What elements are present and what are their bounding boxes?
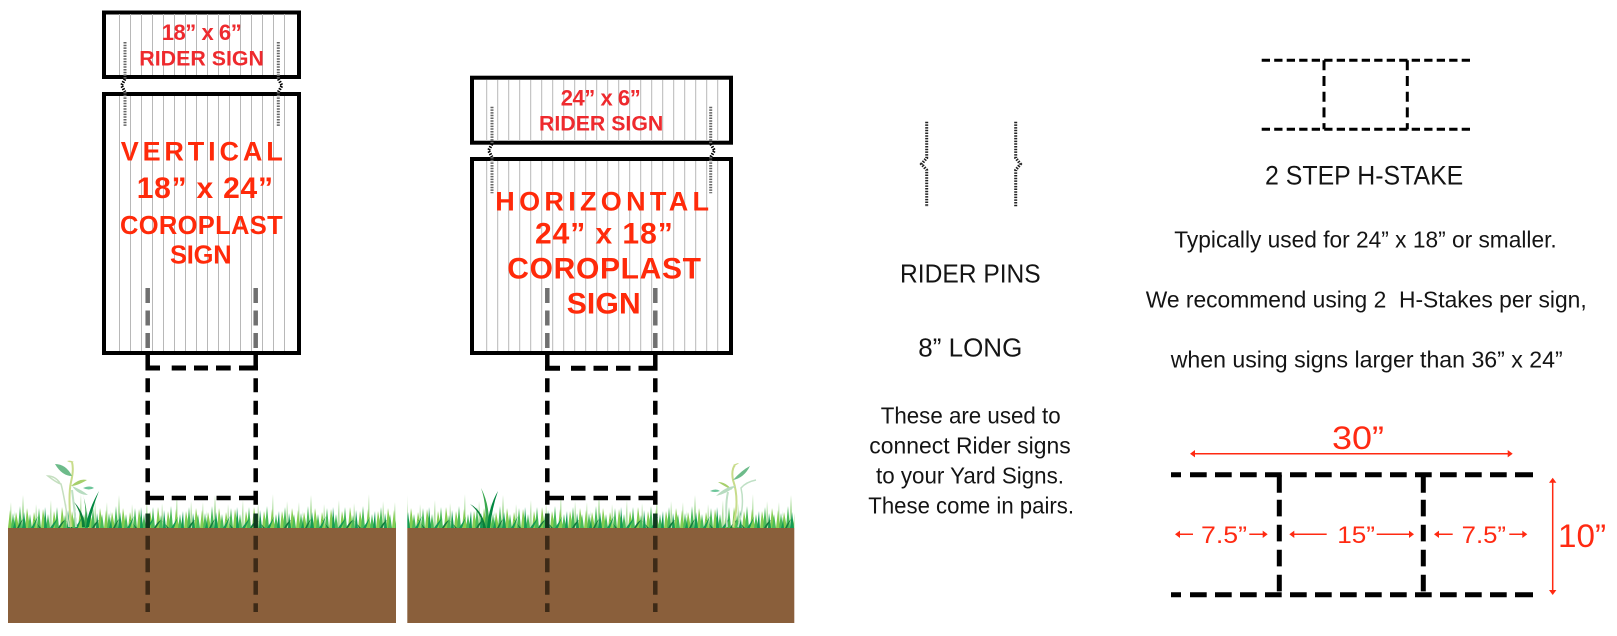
- text block: rider pin description: to your Yard Signs.: [876, 462, 1064, 488]
- icon: H-stake small: [1262, 60, 1471, 129]
- dimension: 30 inch width: 30”: [1332, 420, 1384, 456]
- heading: rider pins: RIDER PINS: [900, 258, 1041, 288]
- panel: horizontal sign assembly: [407, 78, 794, 623]
- icon: rider pin pair: [922, 122, 1020, 207]
- rider sign label: 18” x 6”: [162, 20, 242, 45]
- icon: young plant: [710, 463, 756, 527]
- rider sign label: RIDER SIGN: [539, 113, 663, 136]
- dimension: 30 inch width: [1190, 420, 1513, 457]
- main sign label: SIGN: [567, 287, 641, 320]
- H-stake outline: [1171, 475, 1533, 595]
- main sign label: VERTICAL: [121, 136, 283, 166]
- dimension: center 15 inch: [1289, 522, 1414, 549]
- main sign label: 18” x 24”: [137, 172, 273, 205]
- main sign label: HORIZONTAL: [495, 187, 709, 217]
- rider pins connecting signs: [122, 42, 282, 127]
- main sign label: SIGN: [170, 241, 232, 269]
- main sign label: COROPLAST: [507, 252, 701, 285]
- icon: grass tuft: [470, 488, 498, 528]
- text block: usage: Typically used for 24” x 18” or smaller.: [1174, 226, 1557, 252]
- rider sign label: RIDER SIGN: [139, 48, 264, 71]
- text block: usage: We recommend using 2 H-Stakes per sign,: [1146, 286, 1587, 312]
- ground: soil: [407, 528, 794, 623]
- heading: 2 step H-stake: 2 STEP H-STAKE: [1265, 160, 1463, 190]
- main sign label: [120, 136, 283, 269]
- heading: pin length: 8” LONG: [918, 333, 1022, 363]
- ground: soil: [8, 528, 396, 623]
- dimension: center 15 inch: 15”: [1337, 522, 1375, 549]
- main sign label: 24” x 18”: [535, 217, 673, 250]
- ground: grass: [8, 492, 396, 528]
- rider pins connecting signs: [488, 107, 714, 193]
- dimension: left 7.5 inch: [1175, 522, 1268, 549]
- ground: grass: [407, 492, 794, 528]
- main sign label: [495, 187, 709, 320]
- main sign: vertical 18 x 24: [104, 94, 299, 353]
- dimension: 10 inch height: [1549, 478, 1606, 595]
- panel: 2 step H-stake: [1146, 60, 1606, 595]
- rider sign: 24 x 6: [472, 78, 731, 143]
- text block: rider pin description: connect Rider signs: [869, 432, 1071, 458]
- dimension: right 7.5 inch: [1434, 522, 1527, 549]
- rider sign label: [539, 85, 663, 136]
- main sign: horizontal 24 x 18: [472, 107, 731, 353]
- dimension: 10 inch height: 10”: [1558, 518, 1606, 554]
- dimension: left 7.5 inch: 7.5”: [1201, 522, 1247, 549]
- dimension: right 7.5 inch: 7.5”: [1462, 522, 1506, 549]
- main sign label: COROPLAST: [120, 212, 283, 240]
- H-stake: [545, 288, 658, 612]
- text block: usage: [1146, 226, 1587, 372]
- H-stake: [146, 288, 258, 612]
- rider sign: 18 x 6: [104, 12, 299, 77]
- text block: rider pin description: These are used to: [881, 402, 1061, 428]
- text block: rider pin description: [868, 402, 1074, 518]
- text block: usage: when using signs larger than 36” x 24”: [1170, 346, 1563, 372]
- text block: rider pin description: These come in pairs.: [868, 492, 1074, 518]
- rider sign label: [139, 20, 264, 71]
- icon: young plant: [48, 461, 99, 527]
- panel: rider pins: [868, 122, 1074, 518]
- panel: vertical sign assembly: [8, 12, 396, 623]
- diagram: dimensioned H-stake: [1171, 420, 1606, 595]
- rider sign label: 24” x 6”: [561, 85, 641, 110]
